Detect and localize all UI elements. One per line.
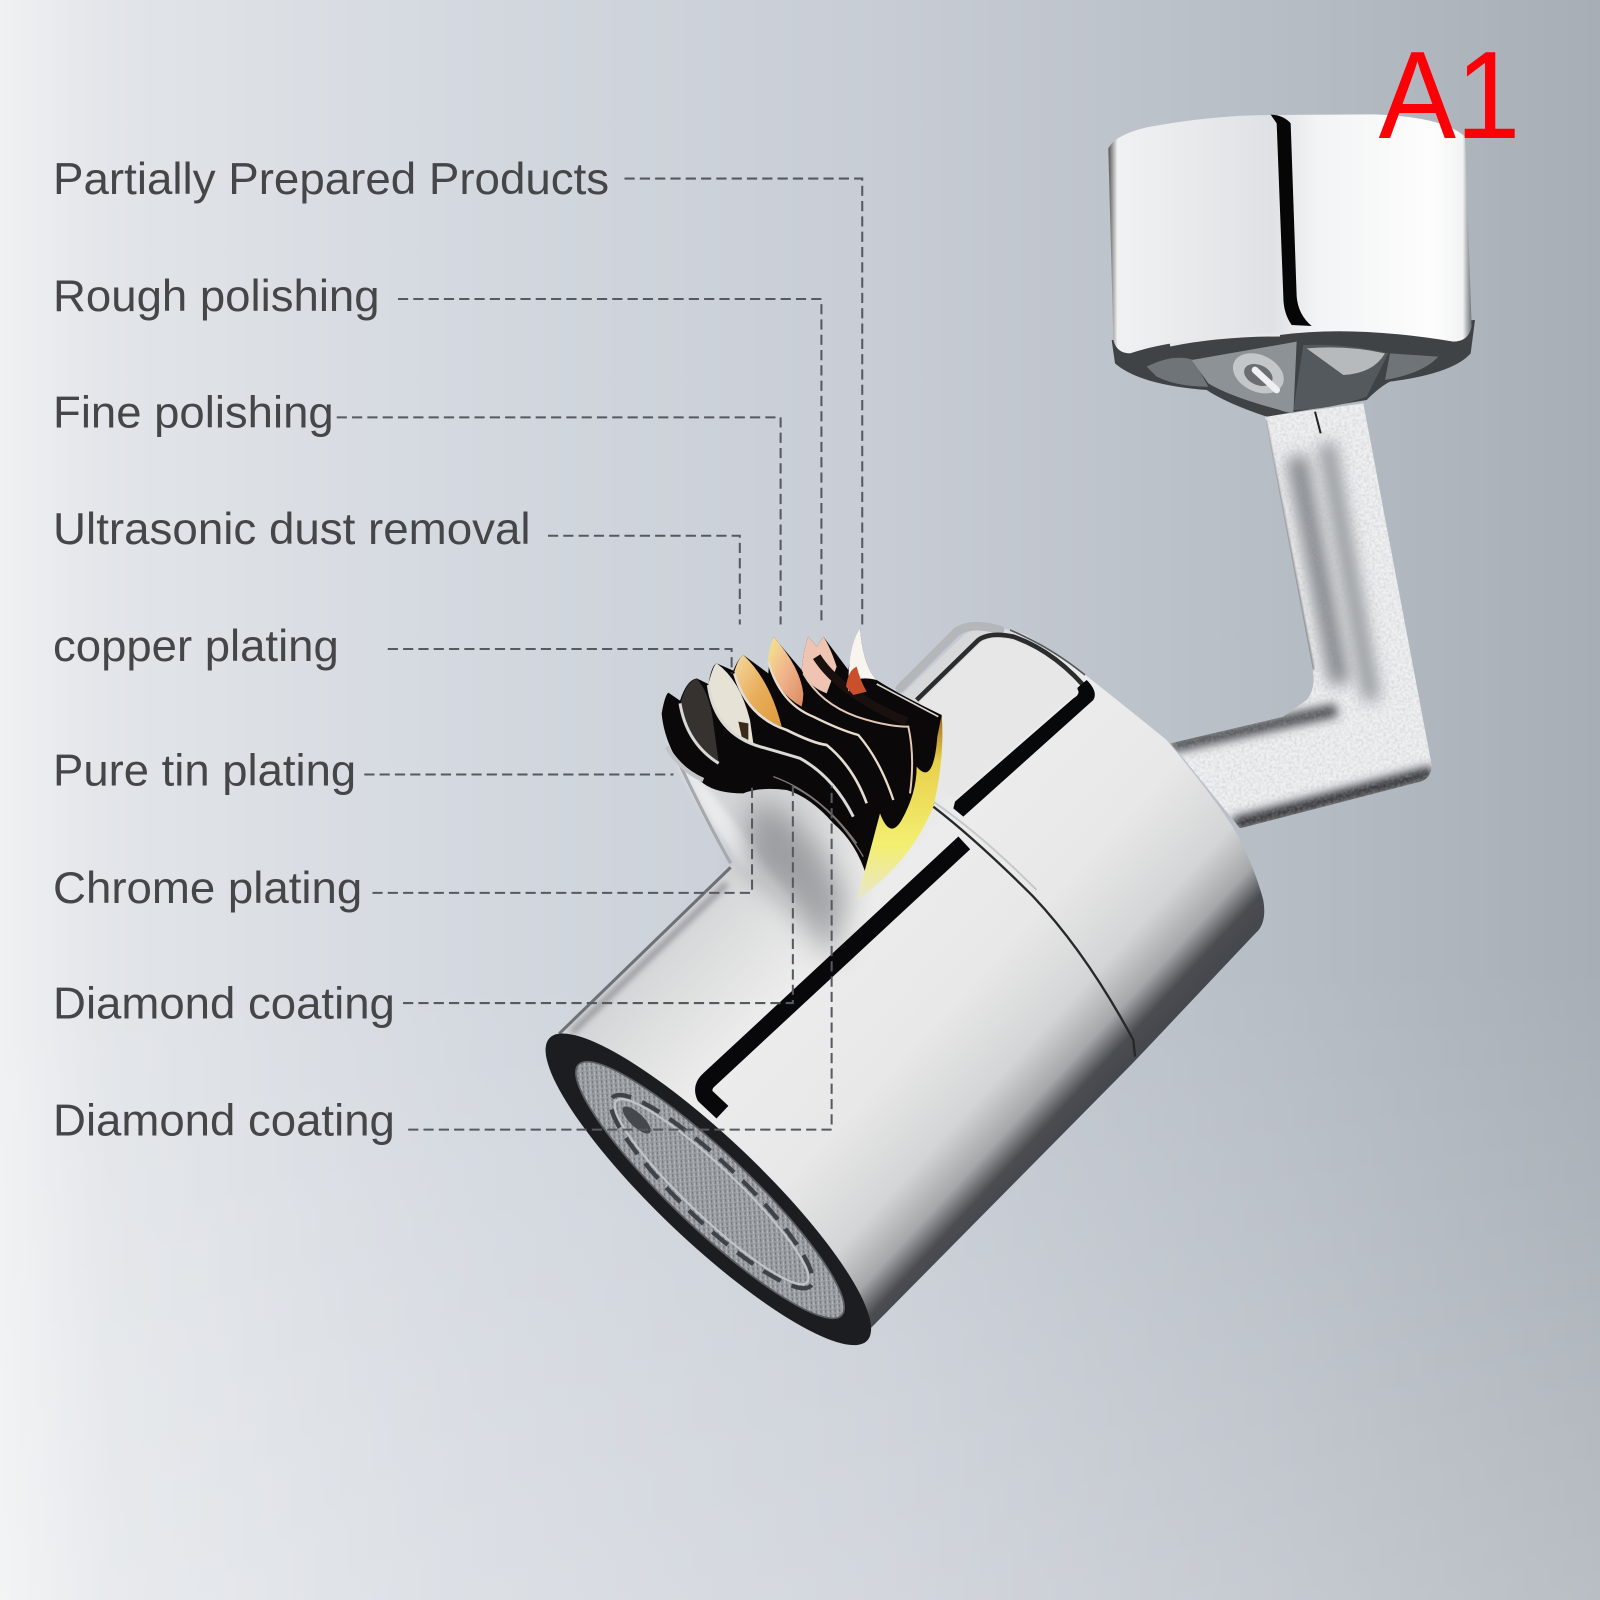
label: copper plating: copper plating bbox=[53, 620, 339, 671]
arm: top shadow of horizontal section bbox=[1170, 710, 1337, 747]
flakes: orange leaf bbox=[734, 655, 782, 727]
swivel head bbox=[1108, 114, 1475, 417]
leader: Fine polishing bbox=[337, 417, 781, 624]
label: Ultrasonic dust removal: Ultrasonic dust removal bbox=[53, 503, 531, 554]
faucet body bbox=[556, 626, 1264, 1332]
head: polished cap bbox=[1108, 114, 1472, 353]
collar: seam bbox=[933, 807, 1135, 1057]
label: Pure tin plating: Pure tin plating bbox=[53, 745, 356, 796]
flakes: yellow flame edge bbox=[857, 715, 942, 900]
body: neck edge bbox=[676, 755, 731, 863]
head: vertical slot bbox=[1271, 115, 1312, 326]
arm: bottom shadow of horizontal section bbox=[1233, 773, 1433, 825]
flakes: yellow leaf bbox=[768, 637, 803, 707]
leader: Diamond coating 1 bbox=[403, 786, 793, 1003]
arm: left streak bbox=[1297, 457, 1340, 683]
arm: cast texture bbox=[1174, 404, 1431, 828]
leader: copper plating bbox=[388, 649, 732, 673]
label: Diamond coating 1: Diamond coating bbox=[53, 977, 395, 1028]
leader: Chrome plating bbox=[372, 786, 752, 893]
leader: Diamond coating 2 bbox=[408, 786, 832, 1130]
body: chrome cylinder bbox=[556, 628, 1264, 1332]
leader: Rough polishing bbox=[398, 299, 821, 624]
body: soft shadow below flakes bbox=[745, 801, 847, 964]
arm: shading inside silhouette bbox=[1150, 400, 1450, 840]
aerator: inner ring highlight bbox=[599, 1083, 824, 1300]
aerator bbox=[514, 1001, 903, 1378]
body: collar details bbox=[900, 626, 1135, 1057]
leader: Ultrasonic dust removal bbox=[548, 536, 740, 624]
collar: inner dark line bbox=[917, 635, 1092, 700]
head: lower collar bbox=[1112, 320, 1475, 417]
leader lines bbox=[337, 179, 862, 1130]
head: cone, right facet bbox=[1293, 345, 1388, 410]
arm: slit bbox=[1315, 412, 1321, 433]
arm: right streak bbox=[1327, 443, 1372, 700]
collar: outer edge dark line bbox=[1010, 630, 1085, 675]
flakes: lower curved rims bbox=[773, 777, 863, 857]
leader: Pure tin plating bbox=[364, 773, 673, 775]
head: collar opening bbox=[1147, 358, 1208, 387]
collar: window fill bbox=[920, 638, 1078, 798]
head: screw bbox=[1226, 345, 1290, 401]
label: Partially Prepared Products: Partially Prepared Products bbox=[53, 153, 609, 204]
label: Rough polishing: Rough polishing bbox=[53, 270, 380, 321]
head: rim glints bbox=[1170, 335, 1280, 345]
collar: black groove bbox=[953, 680, 1095, 817]
leader: Partially Prepared Products bbox=[624, 179, 862, 624]
aerator: mesh face bbox=[552, 1037, 868, 1343]
flakes: white leaf rim bbox=[708, 685, 853, 817]
process labels bbox=[53, 153, 609, 1146]
aerator: center eye bbox=[619, 1103, 655, 1137]
collar: silver outer rim bbox=[900, 626, 1000, 688]
body: upper edge outline bbox=[559, 867, 731, 1034]
faucet arm bbox=[1170, 403, 1432, 828]
label: Diamond coating 2: Diamond coating bbox=[53, 1095, 395, 1146]
aerator: inner ring bbox=[592, 1076, 831, 1307]
flakes: white tip leaf bbox=[848, 628, 877, 692]
flakes: pink leaves bbox=[802, 637, 837, 693]
flakes: front top edge bbox=[877, 684, 938, 717]
flakes: grey leaf bbox=[681, 679, 719, 762]
label: Chrome plating: Chrome plating bbox=[53, 862, 362, 913]
label: Fine polishing: Fine polishing bbox=[53, 387, 334, 438]
body: long black groove bbox=[704, 843, 964, 1112]
body: bright neck bbox=[668, 740, 806, 918]
arm: left outer edge bbox=[1265, 420, 1313, 670]
flakes: dark mass bbox=[662, 628, 942, 877]
aerator: dark outer ring bbox=[514, 1001, 903, 1378]
flakes: white leaf bbox=[708, 663, 753, 743]
layered plating flakes bbox=[662, 628, 942, 900]
model code A1: A1 bbox=[1379, 26, 1520, 165]
head: cone, left facet bbox=[1192, 342, 1297, 413]
arm: white elbow silhouette bbox=[1170, 403, 1432, 828]
flakes: silver lip bbox=[667, 747, 703, 780]
